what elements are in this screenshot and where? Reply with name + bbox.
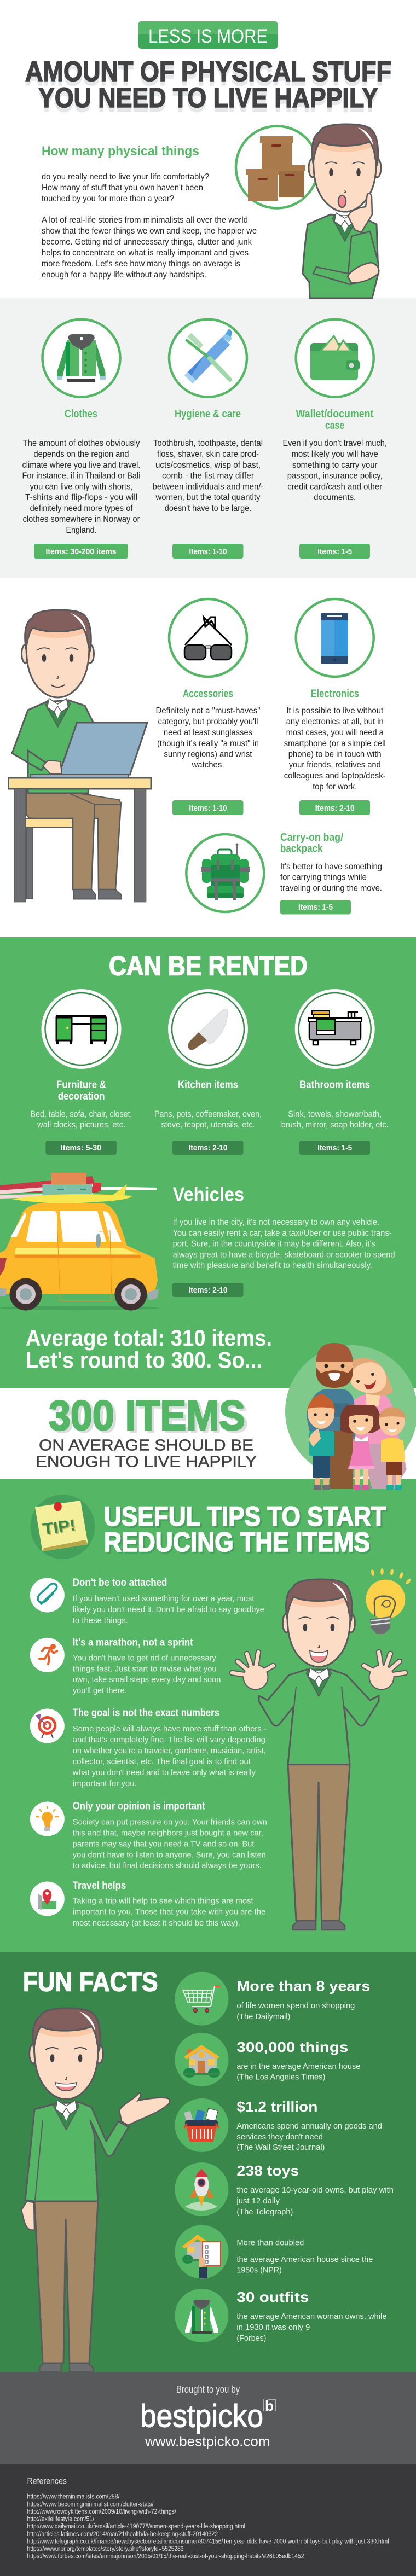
heading: furniture: Furniture & [56, 1079, 106, 1091]
heading: clothes: Clothes [65, 408, 97, 420]
callout: 300 items [36, 1392, 257, 1471]
heading: carry-on bag [280, 831, 343, 855]
text: hygiene: comb - the list may differ [162, 472, 254, 480]
text: accessories: sunny regions) and wrist [164, 749, 252, 759]
text: clothes [22, 439, 140, 535]
text: fact 5: the average American house since the [236, 2255, 373, 2264]
text: fact 1: (The Dailymail) [236, 2012, 290, 2021]
text: fact 4 [236, 2185, 394, 2217]
text: tip 2: You don't have to get rid of unnecessary [73, 1654, 216, 1663]
text: vehicles [173, 1218, 395, 1270]
panel: essentials [22, 319, 387, 559]
character: thinking man [303, 124, 381, 298]
text: furniture: Bed, table, sofa, chair, closet, [31, 1109, 132, 1119]
character: presenting man [21, 2008, 170, 2372]
reference links: https://www.becomingminimalist.com/clutter-stats/ [27, 2501, 154, 2508]
callout: 300 items: ENOUGH TO LIVE HAPPILY [36, 1453, 257, 1471]
background: green tips panel [0, 1479, 416, 1952]
text: tip 5: most necessary (at least it should be this way). [73, 1918, 240, 1928]
text: electronics: phone) to be in touch with [288, 749, 382, 759]
text: wallet: documents. [314, 493, 356, 502]
text: tip 2: things fast. Just start to revise what you [73, 1664, 217, 1674]
reference links: https://www.theminimalists.com/288/ [27, 2494, 120, 2501]
icon: tip sticky note [30, 1495, 95, 1559]
heading: carry-on bag: Carry-on bag/ [280, 831, 343, 844]
card: accessories [155, 599, 261, 815]
button: bathroom items [299, 1141, 370, 1155]
button: carry-on items: Items: 1-5 [298, 903, 333, 912]
heading: kitchen: Kitchen items [178, 1079, 238, 1091]
fact: shopping years [175, 1972, 370, 2026]
text: electronics [284, 706, 386, 792]
text: clothes: climate where you live and travel. [22, 461, 140, 470]
text: hygiene: ucts/cosmetics, wisp of bast, [155, 461, 261, 470]
callout: 300 items: 300 ITEMS [49, 1392, 245, 1439]
character: man with raised hands [232, 1579, 405, 1930]
text: kitchen [154, 1109, 262, 1130]
button: vehicles items [172, 1283, 243, 1297]
button: accessories items [172, 800, 243, 815]
text: tip 4: this and that, maybe neighbors just bought a new car, [73, 1828, 263, 1838]
icon: sunglasses [184, 617, 232, 660]
icon: bathtub [308, 1011, 361, 1045]
text: tip 3: important for you. [73, 1779, 137, 1788]
text: bathroom: brush, mirror, soap holder, etc. [281, 1120, 389, 1130]
text: fact 3 [236, 2121, 382, 2152]
heading: fact 1: More than 8 years [236, 1978, 370, 1994]
text: fact 5: More than doubled [236, 2238, 304, 2247]
text: kitchen: stove, teapot, utensils, etc. [161, 1120, 255, 1130]
card: bathroom [281, 989, 389, 1155]
intro text: do you really need to live your life comfortably? [42, 172, 209, 182]
text: fact 4: the average 10-year-old owns, but play with [236, 2185, 394, 2195]
text: fact 3: (The Wall Street Journal) [236, 2143, 325, 2152]
text: furniture: wall clocks, pictures, etc. [37, 1120, 125, 1130]
heading: fact 6: 30 outfits [236, 2289, 309, 2305]
button: hygiene items: Items: 1-10 [189, 547, 227, 556]
heading: useful tips: REDUCING THE ITEMS [104, 1527, 370, 1557]
text: fact 3: services they don't need [236, 2132, 323, 2142]
text: hygiene [152, 439, 264, 513]
text: fact 2: (The Los Angeles Times) [236, 2073, 325, 2082]
text: electronics: your friends, relatives and [289, 760, 381, 770]
heading: hygiene: Hygiene & care [175, 408, 241, 420]
card: electronics [284, 599, 386, 815]
icon: toothbrush and toothpaste [184, 329, 232, 383]
icon: knife [188, 1009, 228, 1050]
text: tip 4: parents may say that you need a TV and so on. But [73, 1839, 255, 1849]
background: grey brand footer [0, 2372, 416, 2464]
heading: fact 2: 300,000 things [236, 2039, 348, 2055]
text: tip 4: Society can put pressure on you. Your friends can own [73, 1818, 267, 1827]
icon: target [36, 1714, 56, 1738]
button: clothes items [34, 544, 128, 559]
intro text: touched by you for more than a year? [42, 194, 174, 203]
text: tip 3 [72, 1724, 267, 1788]
card: wallet [282, 319, 387, 559]
card: furniture [31, 989, 132, 1155]
intro heading: How many physical things [42, 144, 199, 159]
reference links: http://exilelifestyle.com/51/ [27, 2516, 95, 2523]
text: furniture [31, 1109, 132, 1130]
text: electronics: most cases, you will need a [286, 728, 384, 737]
character: man at laptop [9, 610, 151, 902]
text: electronics: colleagues and laptop/desk- [284, 771, 386, 781]
text: tip 5: Taking a trip will help to see which things are most [73, 1897, 254, 1906]
button: kitchen items: Items: 2-10 [188, 1143, 228, 1153]
intro text [42, 172, 257, 280]
text: clothes: you can live only with shorts, [30, 482, 132, 491]
logo mark: b [265, 2398, 274, 2414]
text: accessories: (though it's really "a must" in [157, 739, 259, 748]
text: kitchen: Pans, pots, coffeemaker, oven, [154, 1109, 262, 1119]
icon: house [183, 2045, 220, 2078]
card: carry-on bag [186, 831, 382, 915]
text: clothes: T-shirts and flip-flops - you will [25, 493, 137, 502]
button: electronics items: Items: 2-10 [315, 804, 355, 813]
icon: tip sticky note: TIP! [43, 1517, 78, 1539]
text: clothes: clothes somewhere in Norway or [23, 515, 140, 524]
icon: runner [39, 1645, 57, 1664]
icon: map pin [38, 1889, 56, 1910]
text: electronics: top for work. [313, 782, 357, 792]
text: vehicles: time with pleasure and benefit to health simultaneously. [173, 1261, 372, 1270]
heading: bathroom: Bathroom items [299, 1079, 370, 1091]
text: wallet: credit card/cash and other [287, 482, 382, 491]
button: carry-on items [280, 900, 351, 915]
text: wallet: something to carry your [292, 461, 378, 470]
card: kitchen [154, 989, 262, 1155]
reference links: http://www.dailymail.co.uk/femail/article-419077/Women-spend-years-life-shopping.html [27, 2523, 245, 2530]
icon: paperclip [38, 1584, 57, 1604]
heading: tip 4: Only your opinion is important [73, 1801, 205, 1812]
text: clothes: definitely need more types of [30, 504, 133, 513]
reference links: http://articles.latimes.com/2014/mar/21/health/la-he-keeping-stuff-20140322 [27, 2531, 218, 2538]
intro text: How many of stuff that you own haven't been [42, 183, 203, 193]
text: clothes: For instance, if in Thailand or Bali [22, 472, 140, 480]
text: tip 3: what you don't need and to leave only what is really [72, 1768, 256, 1777]
text: fact 3: Americans spend annually on goods and [236, 2121, 382, 2131]
intro text: show that the fewer things we own and keep, the happier we [42, 226, 257, 236]
icon: desk [56, 1015, 106, 1044]
text: vehicles: always great to have a bicycle, skateboard or scooter to spend [173, 1251, 395, 1260]
text: accessories: category, but probably you'll [158, 717, 258, 726]
icon: smartphone [321, 613, 348, 664]
heading: useful tips: USEFUL TIPS TO START [104, 1501, 386, 1532]
heading: fun facts: FUN FACTS [23, 1967, 158, 1997]
logo wordmark: bestpicko [140, 2399, 263, 2434]
background: white accessories panel [0, 578, 416, 937]
heading: fact 3: $1.2 trillion [236, 2098, 317, 2115]
heading: useful tips [104, 1501, 388, 1559]
text: fact 6: in 1930 it was only 9 [236, 2323, 310, 2332]
heading: wallet [296, 408, 374, 432]
text: accessories: watches. [192, 760, 224, 770]
heading: electronics: Electronics [311, 688, 359, 700]
references [27, 2477, 389, 2560]
heading: useful tips: USEFUL TIPS TO START [106, 1503, 388, 1533]
icon: right raised hand [364, 1652, 405, 1690]
button: furniture items [45, 1141, 117, 1155]
reference links: https://www.npr.org/templates/story/story.php?storyId=5525283 [27, 2546, 184, 2552]
text: fact 6: the average American woman owns, while [236, 2312, 386, 2321]
text: hygiene: Toothbrush, toothpaste, dental [153, 439, 263, 448]
button: electronics items [299, 800, 370, 815]
heading: furniture [56, 1079, 106, 1102]
heading: tip 3: The goal is not the exact numbers [73, 1707, 219, 1719]
illustration: happy family [285, 1343, 416, 1490]
text: bathroom: Sink, towels, shower/bath, [288, 1109, 382, 1119]
heading: wallet: case [325, 420, 344, 432]
brand block [140, 2384, 275, 2450]
heading: average total: Average total: 310 items. [26, 1325, 272, 1351]
text: fact 6: (Forbes) [236, 2334, 266, 2343]
intro text: more freedom. Let's see how many things on average is [42, 259, 240, 269]
text: tip 5 [73, 1897, 265, 1928]
icon: idea bulb [366, 1568, 412, 1634]
heading: vehicles: Vehicles [173, 1183, 244, 1205]
text: electronics: It is possible to live without [286, 706, 384, 716]
text: tip 5: important to you. Those that you take with you are the [73, 1908, 265, 1917]
heading: accessories: Accessories [183, 688, 233, 700]
tip: marathon [30, 1637, 221, 1695]
background: white intro [0, 0, 416, 298]
button: clothes items: Items: 30-200 items [46, 547, 116, 556]
button: bathroom items: Items: 1-5 [317, 1143, 352, 1153]
text: wallet: Even if you don't travel much, [282, 439, 387, 448]
text: vehicles: If you live in the city, it's not necessary to own any vehicle. [173, 1218, 379, 1227]
text: accessories [155, 706, 261, 770]
heading: can be rented: CAN BE RENTED [109, 951, 308, 981]
button: vehicles items: Items: 2-10 [188, 1286, 228, 1295]
fact: 238 toys [175, 2162, 394, 2217]
text: hygiene: doesn't have to be large. [165, 504, 251, 513]
icon: left raised hand [232, 1652, 273, 1690]
icon: presenting hand [119, 2093, 170, 2125]
brand block: www.bestpicko.com [145, 2434, 270, 2450]
background: dark references footer [0, 2464, 416, 2576]
text: electronics: smartphone (or a simple cell [284, 739, 386, 748]
icon: tip sticky note: TIP! [42, 1516, 77, 1538]
icon: backpack [201, 844, 250, 900]
text: fact 5 [236, 2238, 373, 2275]
icon: shopping cart [183, 1986, 220, 2012]
button: kitchen items [172, 1141, 243, 1155]
text: carry-on bag: It's better to have something [280, 862, 382, 871]
background: grey essentials panel [0, 298, 416, 578]
text: tip 1: If you haven't used something for over a year, most [73, 1594, 255, 1603]
title: YOU NEED TO LIVE HAPPILY [38, 82, 378, 113]
text: bathroom [281, 1109, 389, 1130]
button: wallet items [299, 544, 370, 559]
text: tip 2 [73, 1654, 221, 1695]
tip: travel helps [30, 1880, 265, 1928]
heading: average total [26, 1325, 272, 1373]
icon: moving boxes in circle [236, 126, 318, 208]
text: tip 1: to these things. [73, 1616, 128, 1625]
text: fact 1 [236, 2001, 355, 2021]
reference links: http://www.rowdykittens.com/2009/10/living-with-72-things/ [27, 2509, 177, 2515]
heading: furniture: decoration [58, 1091, 105, 1102]
text: tip 2: you'll get there. [73, 1686, 127, 1695]
text: tip 4: you don't have to listen to anyone. Sure, you can listen [73, 1850, 266, 1860]
text: fact 4: just 12 daily [236, 2196, 280, 2206]
callout: 300 items: 300 ITEMS [51, 1394, 248, 1441]
fact: 30 outfits [175, 2289, 386, 2343]
text: tip 3: Some people will always have more stuff than others - [73, 1724, 267, 1734]
text: carry-on bag [280, 862, 382, 893]
heading: tip 2: It's a marathon, not a sprint [73, 1637, 193, 1648]
fact: 1.2 trillion [175, 2098, 382, 2152]
text: tip 3: and that's completely fine. The list will vary depending [73, 1735, 265, 1745]
text: tip 3: collector, scientist, etc. The final goal is to find out [73, 1757, 251, 1766]
text: fact 2: are in the average American house [236, 2062, 360, 2071]
background: white 300 items band [0, 1388, 416, 1479]
card: clothes [22, 319, 140, 559]
text: accessories: need at least sunglasses [164, 728, 252, 737]
background: dark green fun facts panel [0, 1952, 416, 2372]
tip: your opinion [30, 1801, 267, 1870]
heading: wallet: Wallet/document [296, 408, 374, 420]
text: fact 2 [236, 2062, 360, 2082]
text: fact 4: (The Telegraph) [236, 2207, 293, 2217]
text: hygiene: floss, shaver, skin care prod- [157, 450, 259, 459]
text: clothes: depends on the region and [34, 450, 129, 459]
fact: more than doubled [175, 2225, 373, 2279]
tip: exact numbers [30, 1707, 267, 1788]
text: vehicles: You can easily rent a car, take a taxi/Uber or use public trans- [173, 1229, 392, 1238]
brand block: Brought to you by [176, 2384, 240, 2395]
intro text: A lot of real-life stories from minimalists all over the world [42, 216, 248, 225]
text: hygiene: between individuals and men/- [152, 482, 264, 491]
button: furniture items: Items: 5-30 [61, 1143, 101, 1153]
text: tip 3: on whether you're a traveler, gardener, musician, artist, [73, 1746, 266, 1755]
text: clothes: England. [66, 526, 96, 535]
icon: car with luggage [0, 1173, 159, 1311]
text: vehicles: port. Sure, in the countryside it may be different. Also, it's [173, 1240, 375, 1248]
text: wallet: passport, insurance policy, [287, 472, 383, 480]
card: hygiene [152, 319, 264, 559]
button: wallet items: Items: 1-5 [317, 547, 352, 556]
icon: wallet [310, 336, 360, 380]
button: accessories items: Items: 1-10 [189, 804, 227, 813]
text: wallet: most likely you will have [292, 450, 378, 459]
intro text: enough for a happy life without any hardships. [42, 270, 206, 280]
reference links [27, 2494, 389, 2560]
text: accessories: Definitely not a "must-haves" [155, 706, 261, 716]
heading: average total: Let's round to 300. So... [26, 1347, 262, 1373]
text: carry-on bag: traveling or during the move. [280, 884, 382, 893]
icon: jacket [57, 334, 106, 382]
text: tip 4: to advice, but final decisions should always be yours. [73, 1861, 262, 1870]
text: tip 1 [73, 1594, 264, 1625]
icon: white jacket [185, 2300, 218, 2334]
icon: shopping basket [184, 2108, 219, 2142]
intro text: become. Getting rid of unnecessary things, clutter and junk [42, 237, 252, 247]
text: tip 2: own, take small steps every day and soon [73, 1675, 221, 1684]
intro text: helps to concentrate on what is really important and gives [42, 248, 249, 258]
icon: house and clipboard [182, 2235, 221, 2278]
text: clothes: The amount of clothes obviously [23, 439, 140, 448]
heading: carry-on bag: backpack [280, 843, 323, 855]
title [25, 56, 391, 118]
badge: less is more: LESS IS MORE [148, 26, 268, 47]
heading: fact 4: 238 toys [236, 2162, 299, 2179]
icon: rocket [185, 2169, 217, 2211]
callout: 300 items: ON AVERAGE SHOULD BE [39, 1437, 253, 1455]
icon: light bulb [36, 1806, 59, 1831]
text: wallet [282, 439, 387, 502]
heading: tip 1: Don't be too attached [73, 1577, 167, 1589]
text: fact 5: 1950s (NPR) [236, 2266, 282, 2275]
text: tip 1: likely you don't need it. Don't be afraid to say goodbye [73, 1605, 264, 1614]
text: hygiene: women, but the total quantity [155, 493, 261, 502]
text: fact 1: of life women spend on shopping [236, 2001, 355, 2010]
references: References [27, 2477, 67, 2486]
text: carry-on bag: for carrying things while [280, 873, 367, 882]
reference links: https://www.forbes.com/sites/emmajohnson/2015/01/15/the-real-cost-of-your-shopping-habits/#26b05edb1452 [27, 2554, 304, 2560]
text: fact 6 [236, 2312, 386, 2343]
title: YOU NEED TO LIVE HAPPILY [38, 86, 378, 118]
text: tip 4 [73, 1818, 267, 1870]
button: hygiene items [172, 544, 243, 559]
background: green rented panel [0, 937, 416, 1388]
text: electronics: any electronics at all, but in [286, 717, 384, 726]
tip: don't be too attached [30, 1577, 264, 1625]
heading: useful tips: REDUCING THE ITEMS [106, 1528, 372, 1559]
heading: tip 5: Travel helps [73, 1880, 126, 1892]
fact: 300,000 things [175, 2033, 360, 2086]
